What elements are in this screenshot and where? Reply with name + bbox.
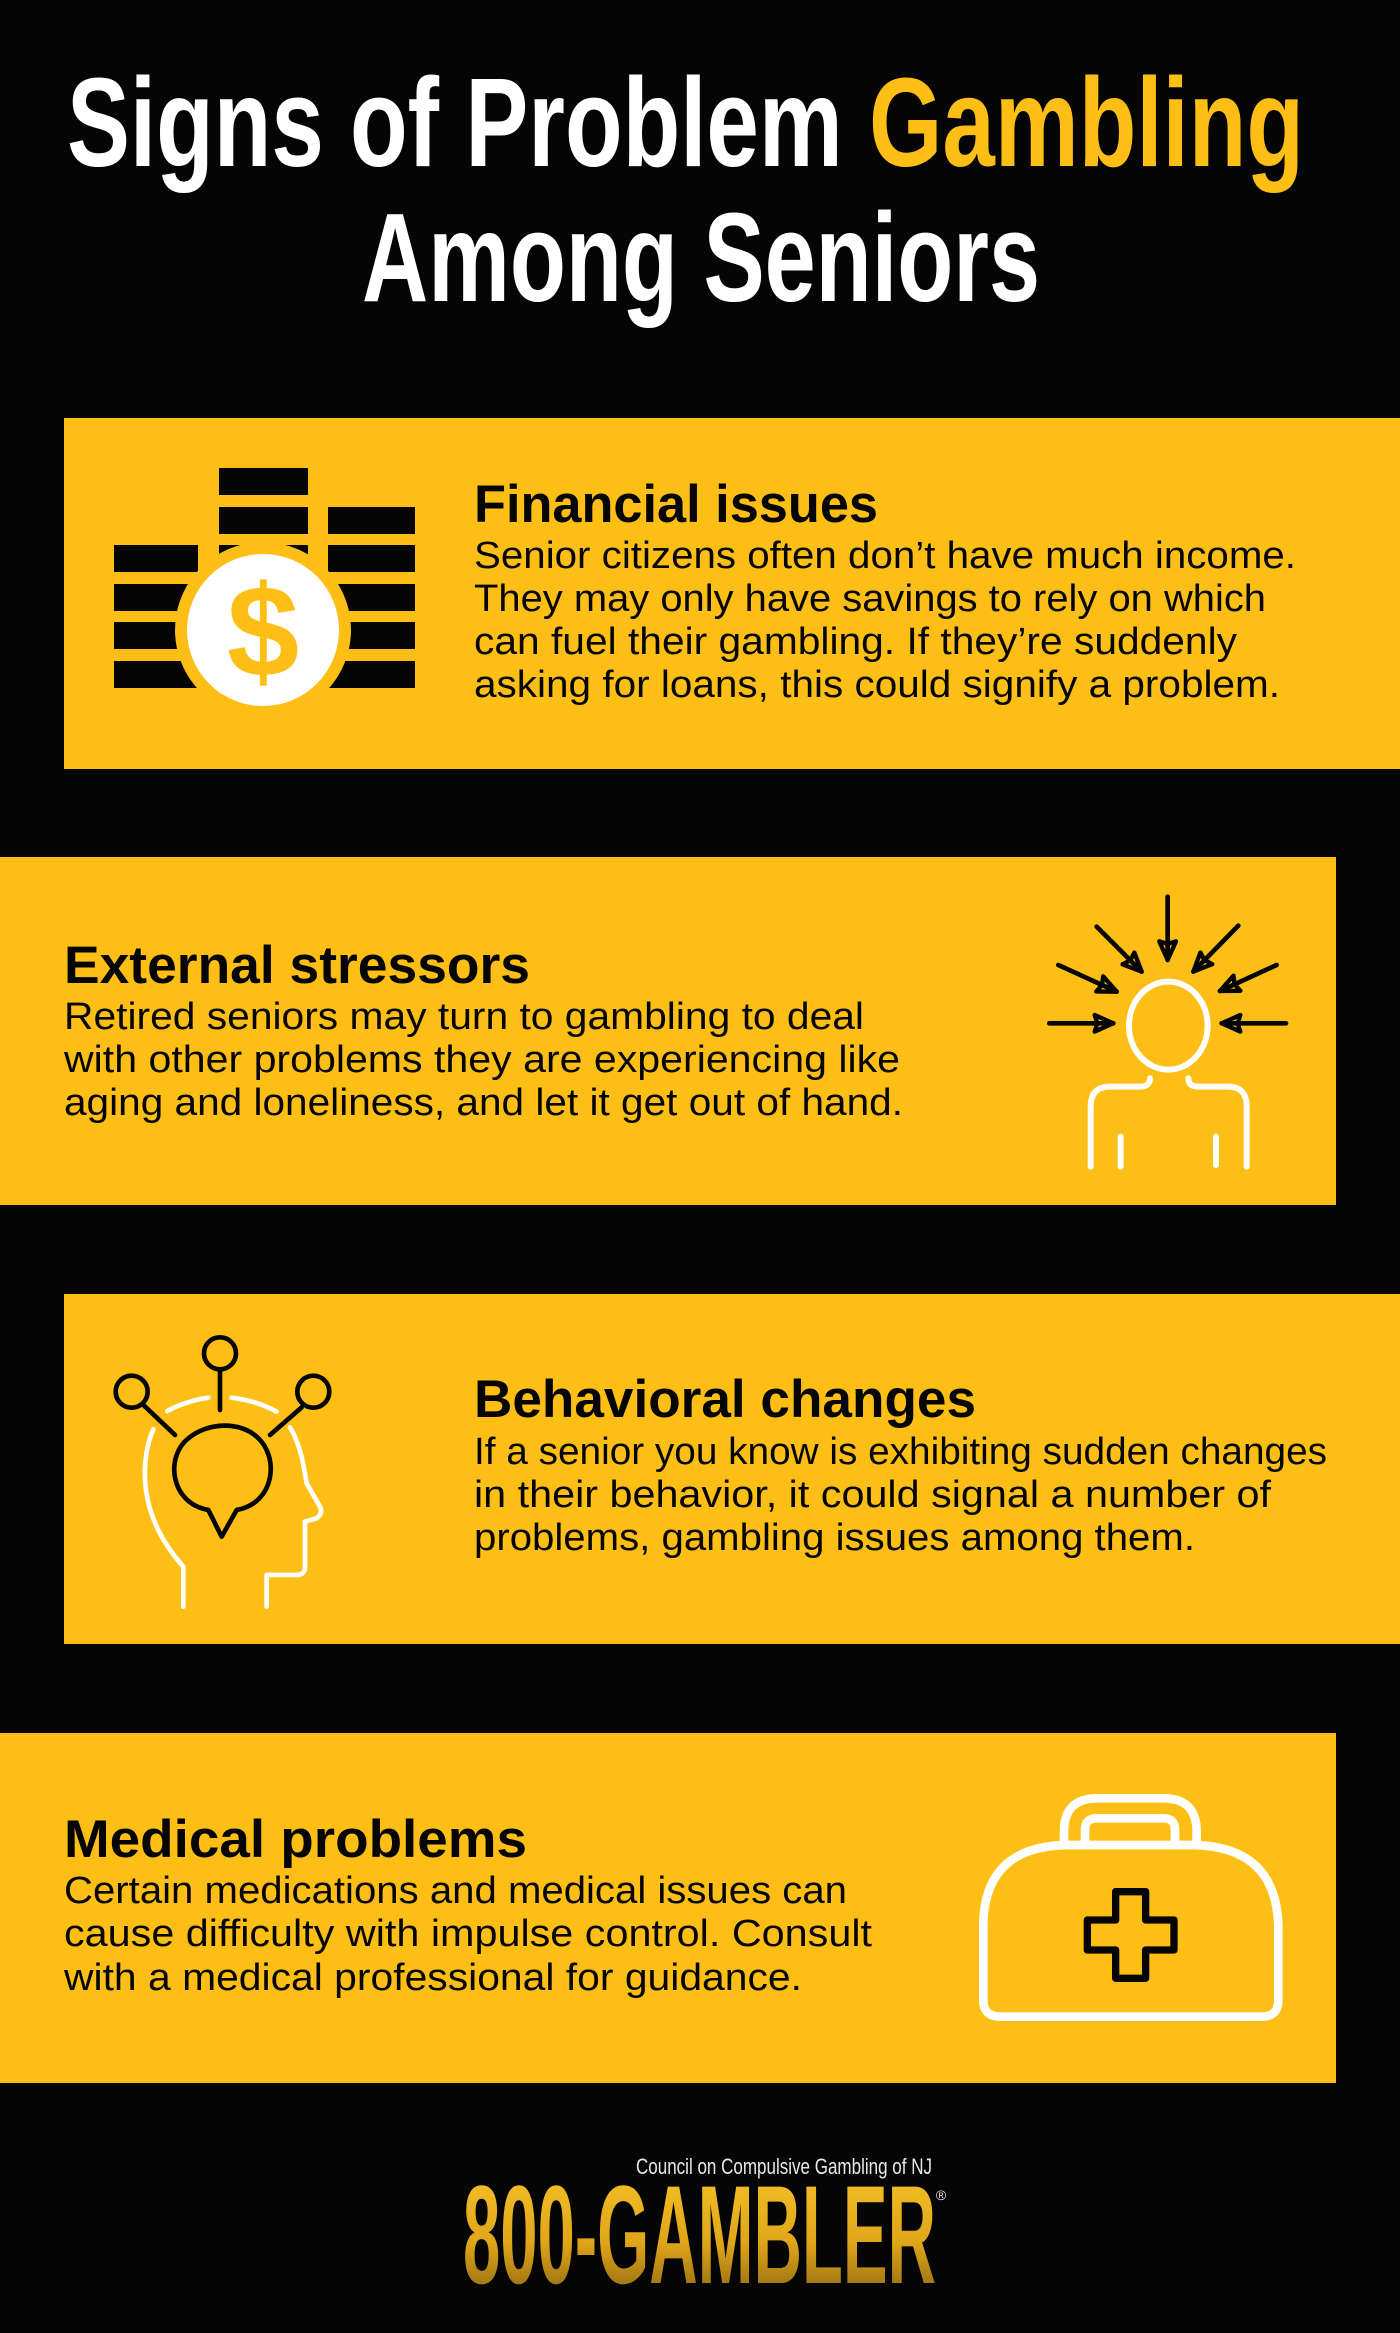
text: financial issues: can fuel their gambling. If they’re suddenly	[474, 621, 1237, 663]
text: behavioral changes: If a senior you know is exhibiting sudden changes	[474, 1431, 1327, 1473]
text: financial issues	[474, 475, 1296, 706]
text: medical problems: Medical problems	[64, 1810, 527, 1869]
text: behavioral changes	[474, 1370, 1327, 1559]
icon: coin stacks: $	[227, 558, 299, 704]
icon: head with ideas	[116, 1337, 329, 1607]
text: medical problems: Certain medications and medical issues can	[64, 1870, 847, 1912]
text: external stressors	[63, 936, 903, 1124]
panel: medical problems	[0, 1733, 1336, 2083]
text: medical problems	[63, 1810, 872, 1999]
icon: coin stacks	[114, 468, 415, 718]
panel: external stressors	[0, 857, 1336, 1205]
text: financial issues: Senior citizens often don’t have much income.	[474, 535, 1296, 577]
text: financial issues: asking for loans, this could signify a problem.	[474, 664, 1280, 706]
footer logo: Council on Compulsive Gambling of NJ	[636, 2154, 932, 2179]
text: external stressors: Retired seniors may turn to gambling to deal	[64, 996, 864, 1038]
icon: stressed person with arrows	[1049, 897, 1286, 1167]
text: financial issues: They may only have savings to rely on which	[474, 578, 1266, 620]
text: medical problems: cause difficulty with impulse control. Consult	[64, 1913, 872, 1955]
text: behavioral changes: problems, gambling issues among them.	[474, 1517, 1195, 1559]
text: behavioral changes: Behavioral changes	[474, 1370, 976, 1429]
footer logo	[463, 2154, 947, 2313]
text: financial issues: Financial issues	[474, 475, 878, 534]
title: Among Seniors	[362, 187, 1040, 328]
panel: financial issues	[64, 418, 1400, 769]
text: external stressors: External stressors	[64, 936, 530, 995]
text: behavioral changes: in their behavior, it could signal a number of	[474, 1474, 1271, 1516]
text: medical problems: with a medical professional for guidance.	[63, 1957, 802, 1999]
title	[67, 52, 1304, 328]
text: external stressors: with other problems they are experiencing like	[63, 1039, 900, 1081]
text: external stressors: aging and loneliness, and let it get out of hand.	[64, 1082, 903, 1124]
panel: behavioral changes	[64, 1294, 1400, 1644]
icon: medical bag	[983, 1798, 1278, 2017]
footer logo: ®	[936, 2187, 947, 2203]
